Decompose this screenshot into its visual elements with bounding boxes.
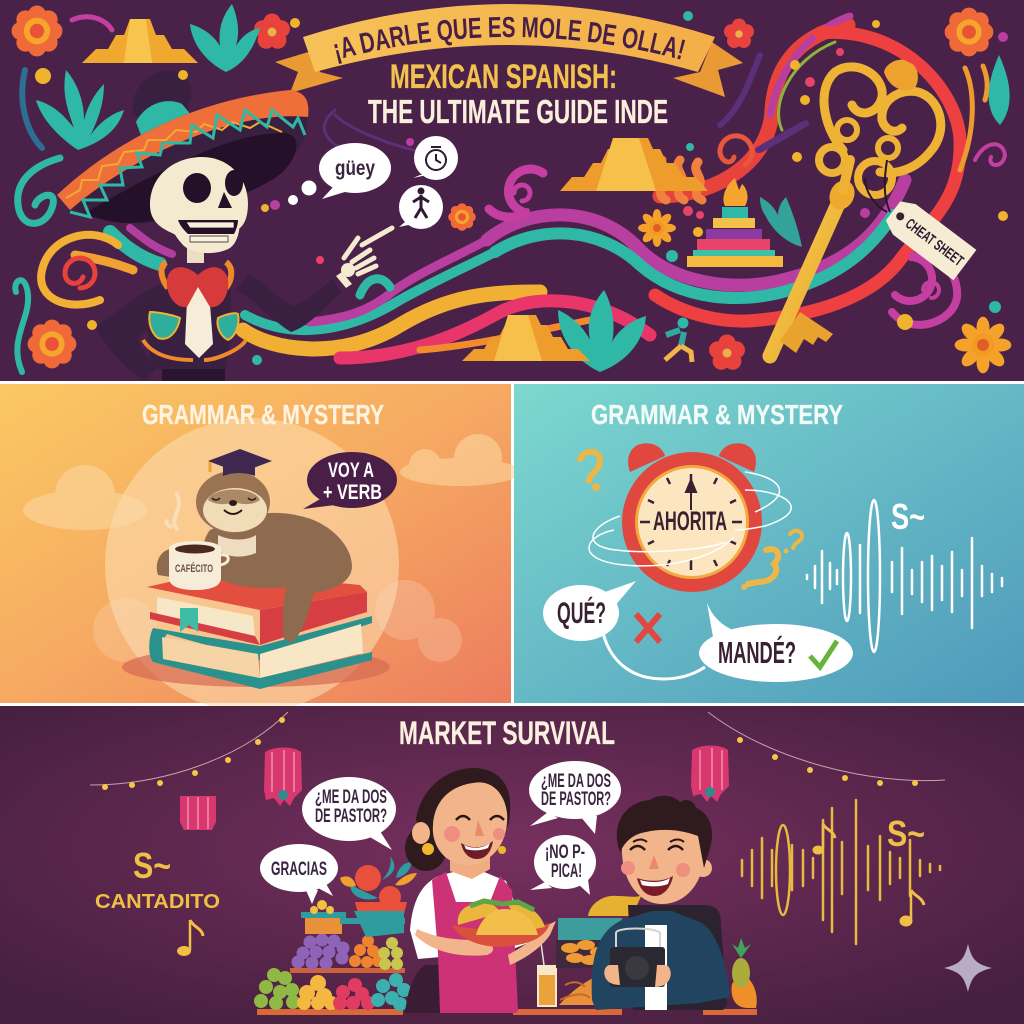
callout: gracias: GRACIAS [271,859,327,880]
illustration: skeleton mariachi [57,70,392,381]
panel: sloth grammar [0,384,520,712]
icon: red cross [636,614,660,642]
arrow: connecting curve [603,633,705,679]
callout: qué? [543,581,636,641]
heading: MARKET SURVIVAL [399,715,615,751]
heading: GRAMMAR & MYSTERY [591,399,843,430]
callout: no pica: PICA! [551,861,582,882]
label: s tilde: S~ [891,496,925,537]
icon: pineapple [732,938,757,1008]
callout: mandé? [699,603,853,682]
icon: cafecito mug [166,492,228,590]
panel: ahorita clock [514,384,1024,703]
callout: voy a + verb [303,452,397,509]
illustration: customer man [592,796,730,1010]
panel: hero banner [0,0,1024,381]
icon: pyramids [82,19,708,361]
clouds [23,434,520,530]
icon: paper lanterns [180,746,729,830]
icon: thought dots, clock and walker [288,136,458,229]
icon: sound wave [807,500,1002,652]
title ribbon text [336,37,682,60]
callout: no pica [530,835,596,895]
illustration: stack of books [147,571,372,689]
title [368,58,668,130]
label: cheat sheet tag: CHEAT SHEET [902,215,967,270]
callout: güey speech bubble: güey [335,157,375,180]
panel: market survival [0,706,1024,1024]
string lights [90,712,945,785]
callout: gracias [260,844,338,904]
icon: cafecito mug: CAFÉCITO [175,562,213,575]
illustration: sloth [157,449,352,643]
illustration: market produce [254,856,757,1015]
label: s tilde and music notes: S~ [887,813,925,854]
callout: me da dos de pastor right: DE PASTOR? [541,789,611,810]
callout: no pica: ¡NO P- [545,842,585,863]
icon: alarm clock [589,443,791,592]
callout: me da dos de pastor left: ¿ME DA DOS [315,787,387,808]
label: s tilde and music notes [813,813,925,926]
label: cantadito [95,845,220,956]
label: cantadito: S~ [133,845,171,886]
icon: alarm clock: AHORITA [653,506,727,536]
banner ribbon: ¡A DARLE QUE ES MOLE DE OLLA! [334,16,686,64]
callout: me da dos de pastor right: ¿ME DA DOS [541,771,611,792]
callout: qué?: QUÉ? [557,596,606,630]
icon: golden key [770,60,941,356]
illustration: layered altar [687,178,783,267]
confetti dots [35,11,1008,365]
title: THE ULTIMATE GUIDE INDE [368,93,668,130]
icon: flowers [12,6,1011,373]
icon: golden sound wave [742,800,940,944]
icon: radio recorder [604,928,671,987]
icon: orange squiggles [660,160,702,200]
callout: voy a + verb: + VERB [323,481,382,504]
callout: güey speech bubble [319,143,391,199]
illustration: vendor woman [405,768,556,1013]
callout: me da dos de pastor left [302,777,396,850]
callout: me da dos de pastor left: DE PASTOR? [315,806,387,827]
icon: check mark [810,641,837,667]
callout: voy a + verb: VOY A [328,459,374,482]
icon: question marks [580,452,802,584]
callout: mandé?: MANDÉ? [718,635,796,670]
title: MEXICAN SPANISH: [390,58,617,96]
icon: agave plants [36,4,1010,372]
banner ribbon [275,4,743,97]
icon: sparkle [944,944,992,992]
heading: GRAMMAR & MYSTERY [142,399,384,430]
label: cantadito: CANTADITO [95,891,220,913]
callout: me da dos de pastor right [529,761,621,834]
icon: running figure [665,318,692,362]
label: cheat sheet tag [882,196,976,280]
flowing ribbons [15,16,1005,372]
icon: plate of tacos [452,901,550,947]
icon: graduation cap [208,449,272,476]
